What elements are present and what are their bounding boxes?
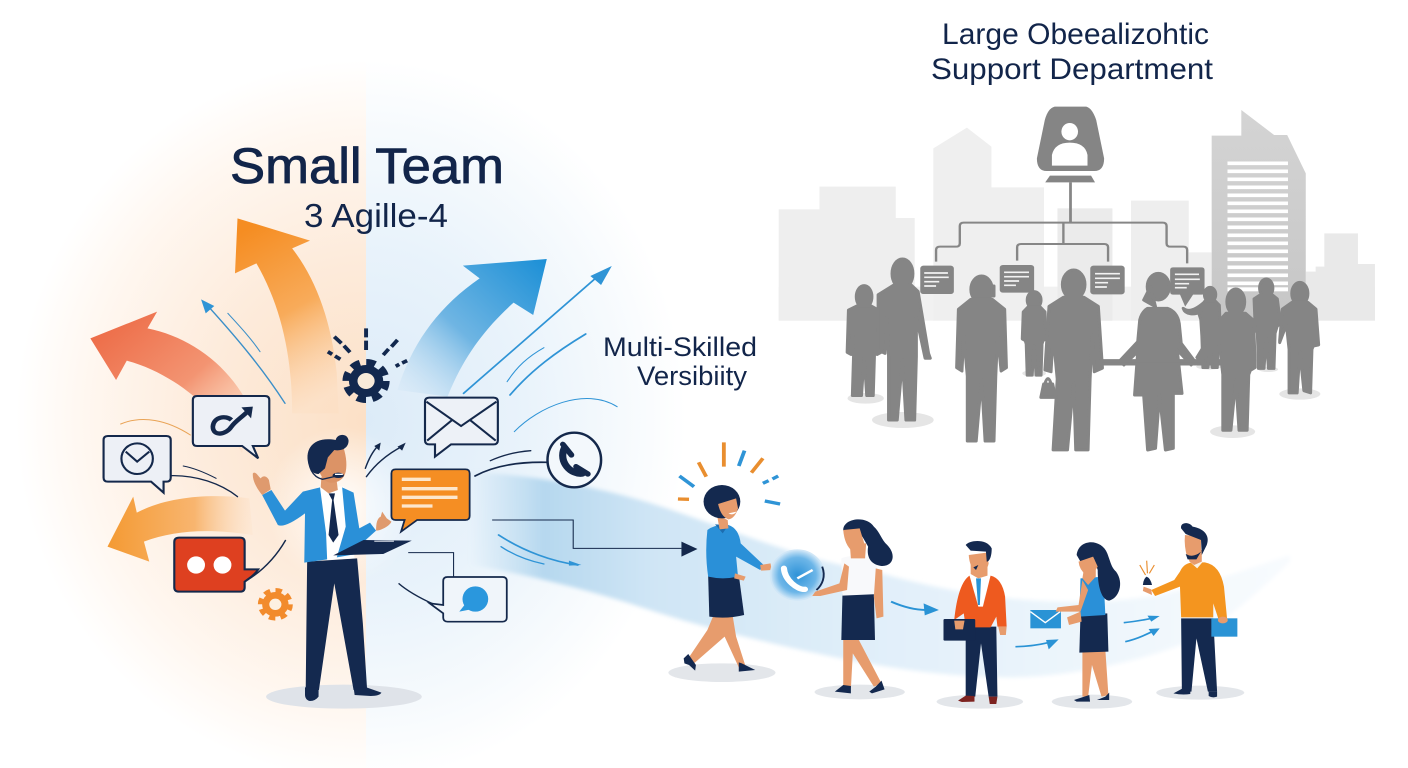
motion lines near clock bubble [171,466,237,497]
panel: large support department illustration [779,107,1375,450]
person silhouette 3 [957,276,1006,441]
headset [309,455,337,479]
icon: orange message bubble [391,469,470,532]
icon: chat bubble with arrow [193,396,269,458]
icon: department head [1037,107,1104,182]
arrow: large blue up-right [397,259,547,397]
arrow: blue to man [891,602,939,615]
arrow: orange left [107,496,253,562]
panel: relay team illustration [668,442,1244,709]
arrow: thin blue up-left [121,299,285,435]
arrows: pair to last person [1124,616,1160,642]
jacket [262,487,376,563]
label: Multi-Skilled Versibiity: Versibiity [637,361,748,391]
blue workflow ribbon [470,472,1290,677]
org chart document boxes [920,265,1205,307]
person silhouette 5 with bag [1041,270,1102,450]
title: Small Team: Small Team [230,138,504,194]
org chart lines [936,182,1187,263]
person silhouette 2 [878,259,930,420]
arrow: thin blue up-right [464,266,617,432]
icon: clock bubble [104,436,171,493]
arrow: black connector to next team [492,520,697,557]
pants [306,558,367,690]
title: Large support department: Large Obeealizohtic [942,18,1209,51]
arrow: red up-left [90,312,249,453]
arrow: large orange up [235,218,339,413]
white glow behind person [267,427,417,587]
title: Large support department [931,18,1214,86]
person silhouette 1 [847,286,881,396]
title: Large support department: Support Department [931,53,1214,86]
person silhouette 8 [1197,289,1255,430]
tie [329,493,339,543]
shirt [316,487,355,560]
person: central agent with headset [253,435,422,709]
title: Small Team: 3 Agille-4 [304,197,448,234]
arrow: blue to woman with envelope [1015,639,1059,649]
label: Multi-Skilled Versibiity: Multi-Skilled [603,332,757,362]
shoes [305,687,381,701]
bar held by group [1100,361,1221,364]
person: woman with envelope [1052,542,1132,709]
city skyline [779,110,1375,321]
person: man in orange jacket [937,541,1023,709]
icon: orange gear [260,590,290,618]
person silhouette 7 [1183,287,1220,368]
person silhouette 6: woman in dress [1120,273,1195,450]
panel: small team illustration [90,218,697,709]
icon: blue envelope [1030,610,1061,628]
person silhouette 4 [1022,292,1046,375]
person: man in orange sweater [1140,523,1244,700]
hair [307,435,349,474]
icon: envelope bubble [425,398,498,457]
ground shadows [847,364,1320,438]
title: Small Team [230,138,504,234]
hands [253,473,391,531]
face [317,443,346,483]
arrow: small dark arrows near person [365,443,406,477]
icon: dark gear [328,328,407,400]
person silhouette 10 [1280,282,1319,393]
icon: blue bubble [399,553,507,622]
label: Multi-Skilled Versibiity [603,332,757,391]
tablet [333,540,412,555]
arrow: blue swoosh lines [499,535,581,566]
person: woman in white top [812,519,905,699]
icon: glowing phone globe [771,550,824,600]
silhouettes: people group [847,259,1320,450]
rays above lead woman [678,442,780,504]
icon: red chat bubble [174,538,286,592]
neck [321,477,338,493]
person silhouette 9 [1254,279,1281,368]
person: lead woman [668,485,776,682]
icon: phone circle [475,433,601,487]
